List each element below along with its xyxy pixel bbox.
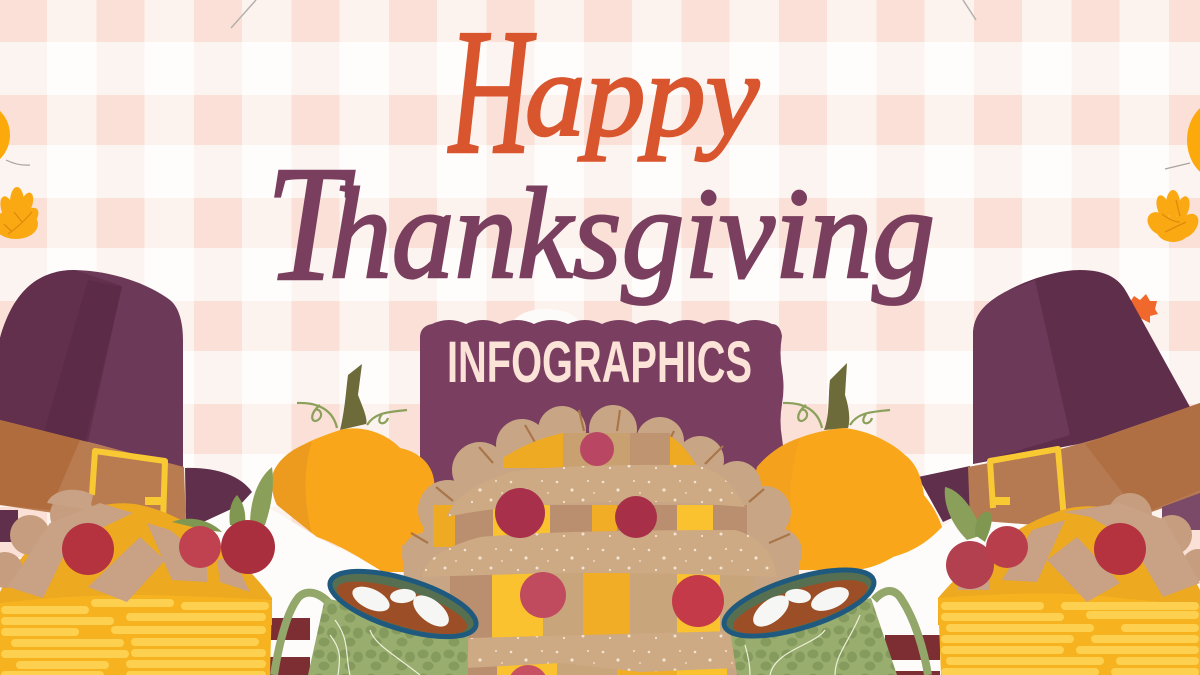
left pilgrim hat [0,270,252,542]
hat brim back [918,466,970,522]
basket leaves [172,467,273,532]
pumpkin stem [340,364,367,430]
purple infographics plate [420,320,784,530]
left basket [0,467,275,675]
white cloth left [180,490,470,675]
tendrils [297,403,407,428]
title: Happy: appy [525,28,760,161]
hat band [0,420,186,525]
crust strips [957,503,1200,602]
red stripes on cloth [270,618,940,675]
basket pie filling [938,506,1200,625]
plate heading: INFOGRAPHICS [447,330,752,395]
basket leaves [945,487,992,542]
crust notches [411,410,790,543]
berries [62,520,275,575]
white cloth right [730,503,1025,675]
crust strips [8,490,250,602]
mug handle [274,593,331,675]
hat band [968,403,1200,530]
right cocoa mug [717,556,928,675]
hanging strings [231,0,976,28]
basket body [938,593,1200,675]
lattice strips [422,465,777,672]
lower left brim [0,510,18,542]
buckle [92,451,165,522]
mug body [308,598,468,675]
hat crown [973,270,1190,464]
title: Thanksgiving: T [266,132,355,315]
title: Thanksgiving: hanksgiving [329,162,935,306]
hat crown [0,270,183,468]
pumpkin body [755,428,942,570]
mug body [730,598,897,675]
basket body [0,595,272,675]
left pumpkin [272,364,435,572]
left cocoa mug [274,558,483,675]
buckle [990,449,1064,519]
marshmallows [349,581,454,633]
pumpkin stem [824,363,849,430]
crust bumps [1108,493,1200,581]
pie berries [495,432,724,675]
basket pie filling [0,503,272,625]
left side decoration: orange fruit and leaf [0,102,42,239]
mug rim and cocoa [717,556,881,650]
pumpkin body [272,428,435,572]
pie filling stripes [433,433,753,675]
right pilgrim hat [918,270,1200,530]
right pumpkin [755,363,942,570]
mug rim and cocoa [323,558,483,650]
hat brim back [185,468,252,530]
lower right brim [1162,493,1200,530]
pie crust scallops [402,405,802,675]
tendrils [783,403,890,428]
right basket [938,487,1200,675]
marshmallows [748,582,852,633]
white arc behind plate [512,309,580,343]
right side decoration: orange fruit and leaf [1143,100,1200,243]
berries [946,523,1146,589]
lattice pie [402,405,802,675]
orange maple leaf [1128,294,1158,323]
crust bumps [0,493,94,588]
mug handle [874,591,928,675]
